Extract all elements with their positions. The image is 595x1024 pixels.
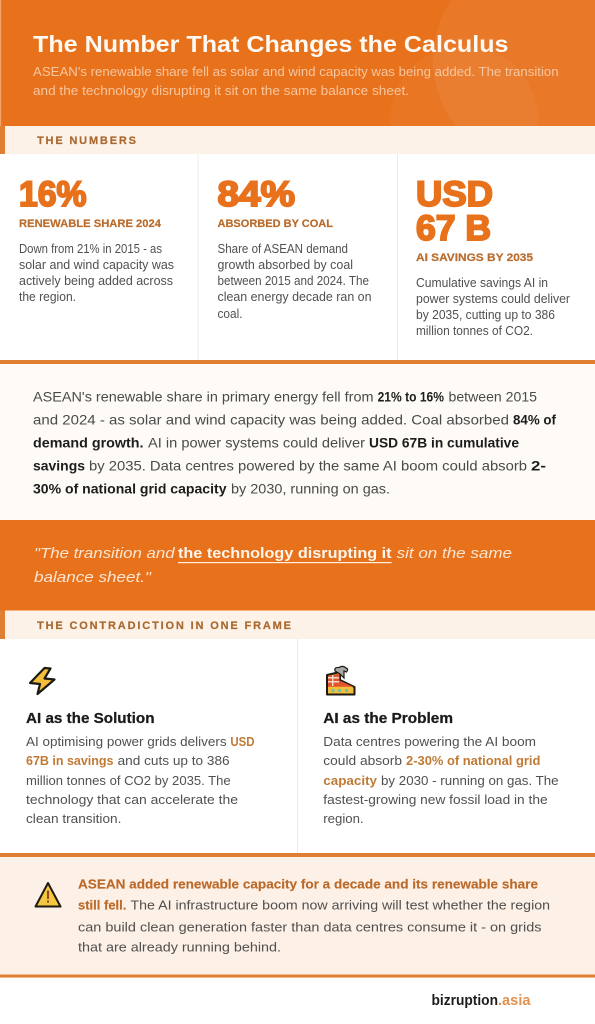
panel: summary paragraph: between 2015 — [448, 390, 537, 404]
text: problem body: region. — [323, 812, 364, 826]
footer logo: bizruption — [432, 993, 498, 1009]
heading: problem: AI as the Problem — [323, 710, 453, 727]
stat: 84%: between 2015 and 2024. The — [218, 274, 369, 288]
panel: stat cards — [0, 154, 595, 364]
stat: USD 67 B: 67 B — [416, 209, 491, 248]
text: callout body: that are already running behind. — [78, 940, 281, 954]
stat: 16%: actively being added across — [19, 274, 173, 288]
text: problem body: could absorb — [323, 754, 402, 768]
text: problem body: by 2030 - running on gas. The — [381, 774, 559, 788]
panel: summary paragraph: savings — [33, 458, 85, 474]
stat: USD 67 B — [416, 175, 570, 338]
text: solution body: AI optimising power grids delivers — [26, 735, 227, 749]
icon: lightning bolt — [30, 668, 54, 694]
text: solution body: clean transition. — [26, 812, 121, 826]
text: problem body: capacity — [323, 774, 377, 788]
quote band: the technology disrupting it — [178, 545, 392, 562]
subtitle: and the technology disrupting it sit on the same balance sheet. — [33, 84, 409, 98]
subtitle: ASEAN's renewable share fell as solar and wind capacity was being added. The transition — [33, 65, 559, 79]
stat: USD 67 B: by 2035, cutting up to 386 — [416, 308, 555, 322]
stat: 84%: coal. — [218, 307, 242, 321]
stat: USD 67 B: power systems could deliver — [416, 292, 570, 306]
section header: the contradiction: THE CONTRADICTION IN ONE FRAME — [37, 620, 291, 632]
text: solution body — [26, 735, 255, 826]
text: solution body: USD — [230, 735, 255, 749]
stat: 84% — [218, 175, 372, 321]
stat: USD 67 B: USD — [416, 175, 493, 214]
text: solution body: and cuts up to 386 — [118, 754, 230, 768]
stat: 16%: solar and wind capacity was — [19, 258, 174, 272]
quote band: sit on the same — [397, 545, 512, 562]
stat: USD 67 B: million tonnes of CO2. — [416, 324, 533, 338]
stat: USD 67 B: Cumulative savings AI in — [416, 276, 548, 290]
stat: USD 67 B: AI SAVINGS BY 2035 — [416, 252, 533, 264]
stat: 84%: growth absorbed by coal — [218, 258, 353, 272]
stat: 16%: the region. — [19, 290, 76, 304]
stat: 16% — [19, 175, 174, 304]
panel: summary paragraph: 30% of national grid capacity — [33, 482, 227, 496]
stat: 84%: ABSORBED BY COAL — [218, 218, 333, 230]
quote band: "The transition and — [34, 545, 175, 562]
panel: summary paragraph: 84% of — [513, 412, 556, 428]
panel: summary paragraph: ASEAN's renewable share in primary energy fell from — [33, 390, 374, 404]
section header: the numbers: THE NUMBERS — [37, 135, 136, 147]
panel: summary paragraph: 2- — [531, 458, 546, 474]
text: solution body: million tonnes of CO2 by 2035. The — [26, 774, 231, 788]
text: callout body: still fell. — [78, 898, 126, 912]
panel: summary paragraph: and 2024 - as solar and wind capacity was being added. Coal absorbed — [33, 412, 509, 428]
text: callout body: can build clean generation faster than data centres consume it - on grids — [78, 920, 542, 934]
panel: summary paragraph — [0, 364, 595, 520]
panel: summary paragraph: USD 67B in cumulative — [369, 436, 519, 450]
panel: summary paragraph: by 2030, running on gas. — [231, 482, 390, 496]
text: solution body: 67B in savings — [26, 754, 114, 768]
stat: 84%: 84% — [218, 175, 295, 214]
panel: AI as the Solution — [26, 668, 255, 826]
text: solution body: technology that can accelerate the — [26, 793, 238, 807]
panel: summary paragraph: AI in power systems could deliver — [148, 436, 365, 450]
icon: factory — [327, 666, 354, 694]
text: callout body — [78, 876, 550, 954]
text: problem body: fastest-growing new fossil load in the — [323, 793, 548, 807]
panel: summary paragraph: by 2035. Data centres powered by the same AI boom could absorb — [89, 458, 527, 474]
panel: summary paragraph: demand growth. — [33, 436, 144, 450]
quote band: balance sheet." — [34, 569, 152, 586]
section header: the contradiction — [0, 610, 595, 639]
icon: warning triangle — [36, 883, 60, 906]
stat: 16%: Down from 21% in 2015 - as — [19, 242, 162, 256]
panel: summary paragraph: 21% to 16% — [378, 390, 444, 404]
text: callout body: The AI infrastructure boom now arriving will test whether the region — [130, 898, 550, 912]
stat: 84%: clean energy decade ran on — [218, 290, 372, 304]
title: The Number That Changes the Calculus — [33, 31, 508, 57]
stat: 16%: RENEWABLE SHARE 2024 — [19, 218, 162, 230]
header panel — [0, 0, 595, 126]
heading: solution: AI as the Solution — [26, 710, 154, 727]
stat: 84%: Share of ASEAN demand — [218, 242, 348, 256]
section header: the numbers — [0, 126, 595, 154]
text: problem body: 2-30% of national grid — [406, 754, 540, 768]
quote band — [0, 520, 595, 610]
callout — [0, 853, 595, 978]
panel: AI as the Problem — [323, 666, 559, 826]
stat: 16%: 16% — [19, 175, 86, 214]
text: callout body: ASEAN added renewable capacity for a decade and its renewable share — [78, 876, 538, 892]
subtitle — [33, 65, 559, 98]
text: problem body — [323, 735, 559, 826]
footer logo: .asia — [498, 993, 531, 1009]
text: problem body: Data centres powering the AI boom — [323, 735, 536, 749]
